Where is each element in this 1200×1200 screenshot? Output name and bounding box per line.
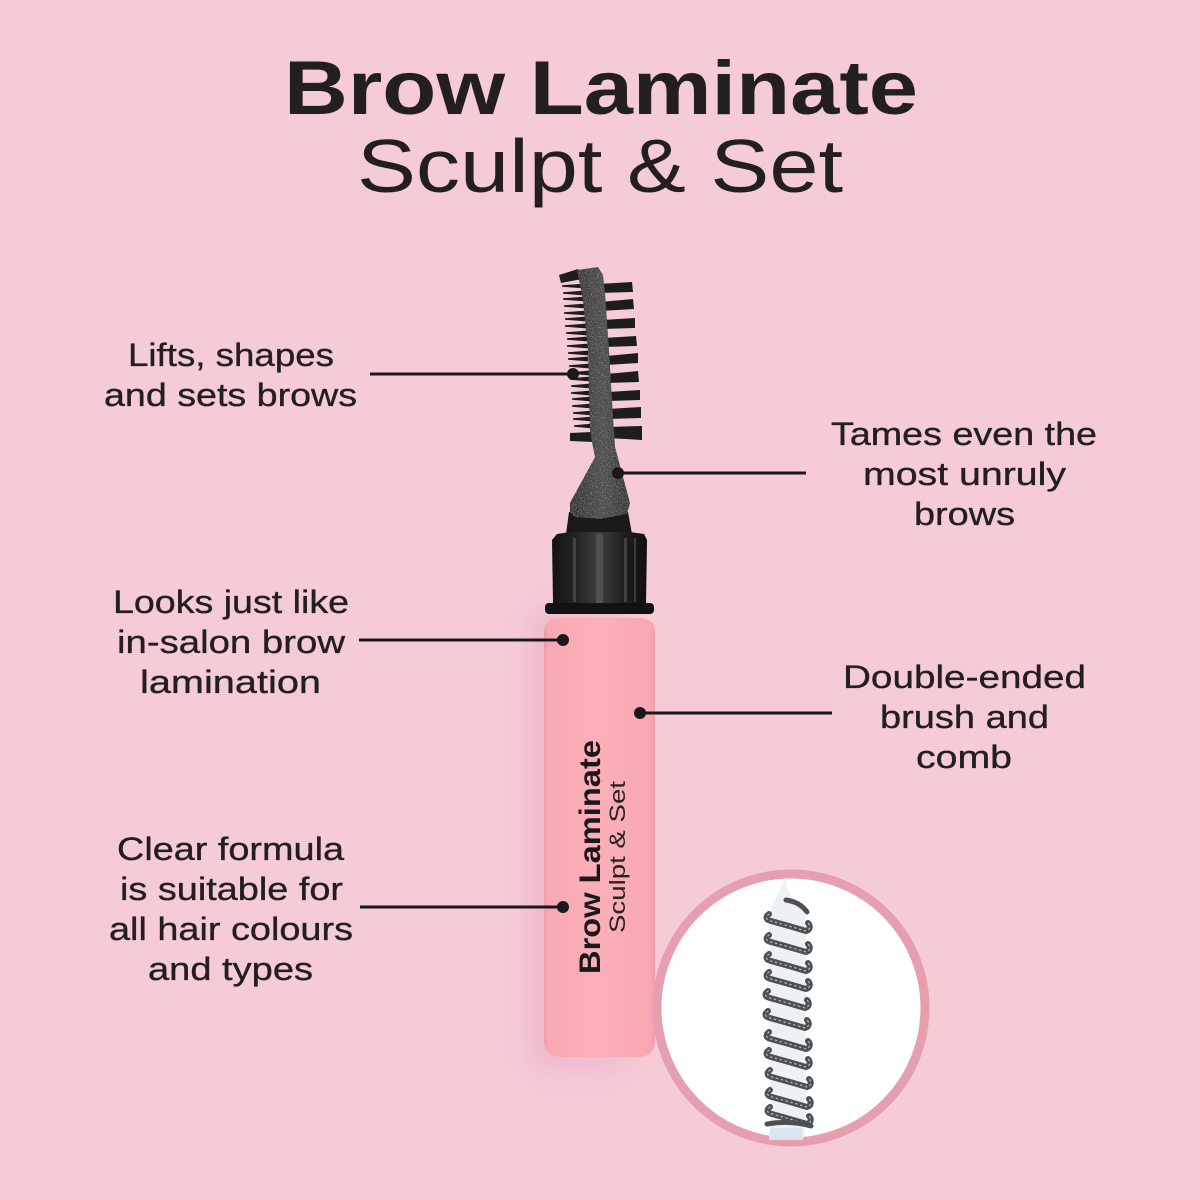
neck — [566, 512, 632, 534]
spiral brush — [766, 877, 811, 1140]
title: Brow Laminate — [284, 46, 918, 131]
callout: double-ended brush and comb: Double-ended — [843, 659, 1086, 695]
comb spine — [570, 267, 630, 519]
brush bristles — [598, 282, 642, 440]
tube label: Brow Laminate — [574, 740, 607, 974]
cap — [552, 532, 647, 603]
cap ribs — [573, 534, 636, 603]
tube label: Sculpt & Set — [605, 781, 630, 933]
callout: looks just like in-salon brow lamination: in-salon brow — [117, 624, 346, 660]
callout: tames even the most unruly brows — [612, 416, 1097, 532]
tube shadow — [528, 610, 628, 1070]
callout: looks just like in-salon brow lamination — [113, 584, 569, 700]
callout: double-ended brush and comb: brush and — [880, 699, 1049, 735]
callout: clear formula suitable for all hair colours and types: is suitable for — [120, 871, 343, 907]
callout: double-ended brush and comb — [634, 659, 1086, 775]
callout: tames even the most unruly brows: Tames even the — [831, 416, 1097, 452]
callout: lifts, shapes and sets brows — [104, 337, 579, 413]
callout: tames even the most unruly brows: most unruly — [863, 456, 1066, 492]
comb teeth — [562, 284, 592, 428]
callout: tames even the most unruly brows: brows — [914, 496, 1015, 532]
tube body — [544, 618, 655, 1057]
callout: double-ended brush and comb: comb — [916, 739, 1012, 775]
callout: looks just like in-salon brow lamination: lamination — [140, 664, 321, 700]
comb end guards — [559, 269, 594, 442]
tube label — [574, 740, 630, 974]
callout: lifts, shapes and sets brows: Lifts, shapes — [128, 337, 334, 373]
product: brow laminate tube with comb — [528, 267, 655, 1070]
callout: clear formula suitable for all hair colours and types: Clear formula — [117, 831, 344, 867]
callout: clear formula suitable for all hair colours and types: all hair colours — [109, 911, 353, 947]
title: Sculpt & Set — [357, 124, 843, 208]
callout: lifts, shapes and sets brows: and sets brows — [104, 377, 357, 413]
callout: clear formula suitable for all hair colours and types: and types — [148, 951, 313, 987]
title — [284, 46, 918, 208]
callout: clear formula suitable for all hair colours and types — [109, 831, 569, 987]
inset circle — [657, 874, 925, 1142]
inset: spiral brush close-up — [657, 874, 925, 1142]
callout: looks just like in-salon brow lamination: Looks just like — [113, 584, 349, 620]
cap flange — [545, 603, 654, 614]
